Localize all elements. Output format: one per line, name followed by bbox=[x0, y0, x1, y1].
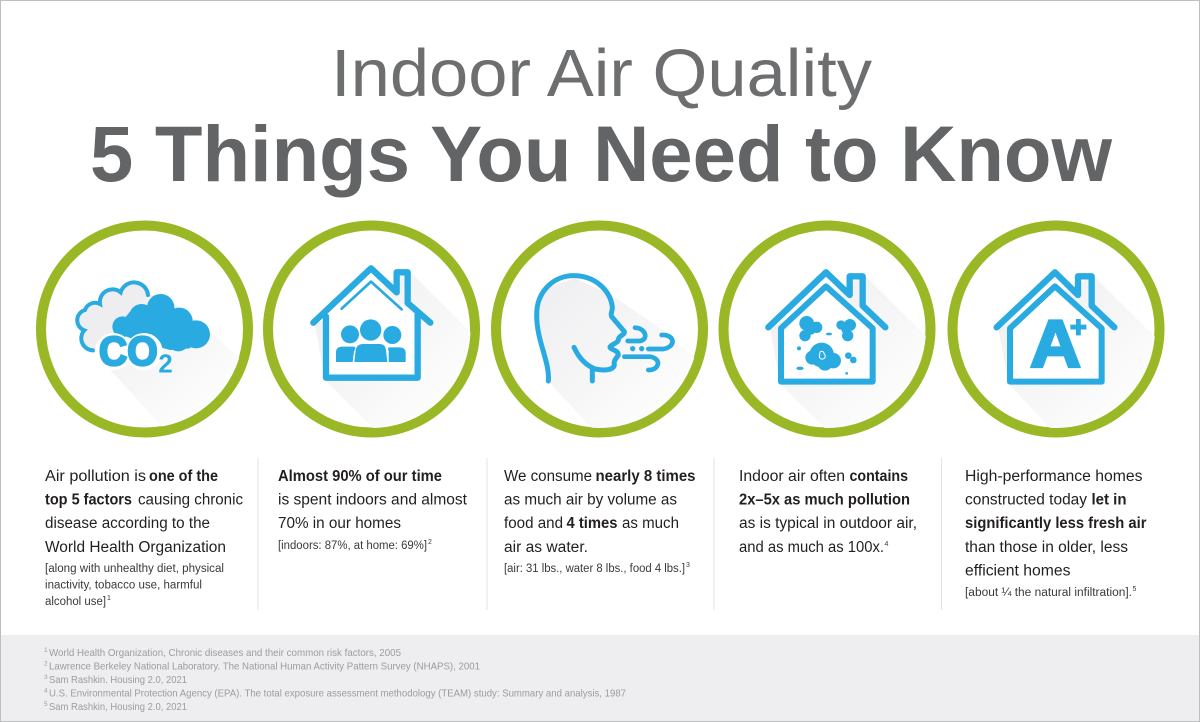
text block 1: air pollution: Air pollution is bbox=[45, 468, 146, 485]
title bbox=[90, 36, 1113, 198]
text block 4: indoor pollution: 2x–5x as much pollution bbox=[739, 492, 910, 508]
text block 5: high-performance homes: High-performance homes bbox=[965, 468, 1143, 485]
panel 4: pollution in house circle icon bbox=[724, 226, 932, 432]
text block 5: high-performance homes: 5 bbox=[1132, 586, 1136, 593]
text block 1: air pollution: alcohol use] bbox=[45, 596, 106, 608]
text block 4: indoor pollution: Indoor air often bbox=[739, 468, 845, 485]
icon: house with A+ rating: + bbox=[1070, 312, 1087, 344]
icon: house with A+ rating bbox=[997, 272, 1114, 382]
text block 5: high-performance homes: let in bbox=[1092, 492, 1126, 508]
text block 4: indoor pollution: contains bbox=[850, 468, 908, 485]
text block 3: air consumed: [air: 31 lbs., water 8 lbs., food 4 lbs.] bbox=[504, 563, 685, 575]
icon: head breathing out bbox=[537, 276, 673, 381]
text block 1: air pollution: World Health Organization bbox=[45, 539, 226, 556]
text block 4: indoor pollution: 4 bbox=[884, 541, 888, 548]
text block 5: high-performance homes: significantly less fresh air bbox=[965, 515, 1146, 532]
text block 2: time indoors: 2 bbox=[428, 539, 432, 546]
text block 2: time indoors: Almost 90% of our time bbox=[278, 468, 442, 485]
text block 1: air pollution: top 5 factors bbox=[45, 492, 132, 508]
text block 2: time indoors bbox=[278, 468, 468, 552]
text block 2: time indoors: is spent indoors and almost bbox=[278, 492, 468, 508]
footnotes: 5 bbox=[44, 701, 48, 708]
icon: house with family bbox=[313, 268, 430, 378]
text block 3: air consumed: 4 times bbox=[566, 515, 618, 532]
footnotes: Lawrence Berkeley National Laboratory. The National Human Activity Pattern Survey (NHAPS), 2001 bbox=[49, 660, 480, 672]
text block 5: high-performance homes: than those in older, less bbox=[965, 539, 1128, 556]
footnotes bbox=[44, 647, 626, 713]
text block 4: indoor pollution bbox=[739, 468, 917, 556]
text block 2: time indoors: 70% in our homes bbox=[278, 515, 401, 532]
text block 1: air pollution: 1 bbox=[107, 595, 111, 602]
title line 1: Indoor Air Quality bbox=[331, 36, 873, 111]
text block 1: air pollution bbox=[45, 468, 243, 608]
text block 3: air consumed bbox=[504, 468, 696, 575]
panel 5: A+ house circle icon bbox=[952, 226, 1160, 432]
text block 3: air consumed: nearly 8 times bbox=[596, 468, 696, 485]
text block 4: indoor pollution: as is typical in outdoor air, bbox=[739, 515, 917, 532]
text block 3: air consumed: We consume bbox=[504, 468, 592, 485]
footnotes: 4 bbox=[44, 688, 48, 694]
panel 2: people in house circle icon bbox=[268, 226, 477, 432]
text block 1: air pollution: inactivity, tobacco use, harmful bbox=[45, 580, 202, 592]
text block 5: high-performance homes: efficient homes bbox=[965, 562, 1071, 580]
text block 3: air consumed: food and bbox=[504, 515, 563, 532]
footnotes: Sam Rashkin. Housing 2.0, 2021 bbox=[49, 674, 187, 686]
text block 1: air pollution: causing chronic bbox=[138, 492, 243, 508]
text block 3: air consumed: as much bbox=[622, 515, 679, 532]
text block 3: air consumed: air as water. bbox=[504, 539, 588, 556]
footnotes: 2 bbox=[44, 660, 48, 668]
footer band bbox=[1, 635, 1199, 721]
text block 1: air pollution: one of the bbox=[149, 468, 218, 485]
footnotes: 3 bbox=[44, 674, 48, 681]
text block 1: air pollution: disease according to the bbox=[45, 515, 210, 532]
text block 2: time indoors: [indoors: 87%, at home: 69%] bbox=[278, 540, 427, 552]
icon: clouds and CO2 bbox=[77, 282, 210, 378]
text block 5: high-performance homes: constructed today bbox=[965, 492, 1087, 508]
icon: house with pollutant clouds bbox=[768, 272, 885, 382]
footnotes: 1 bbox=[44, 647, 48, 654]
icon: clouds and CO2: CO bbox=[99, 328, 158, 374]
title line 2: 5 Things You Need to Know bbox=[90, 109, 1113, 198]
icon: clouds and CO2: 2 bbox=[158, 348, 173, 378]
panel 1: CO2 circle icon bbox=[41, 226, 248, 432]
footnotes: World Health Organization, Chronic diseases and their common risk factors, 2005 bbox=[49, 647, 401, 659]
text block 5: high-performance homes: [about ¼ the natural infiltration]. bbox=[965, 587, 1132, 599]
text block 5: high-performance homes bbox=[965, 468, 1146, 599]
footnotes: U.S. Environmental Protection Agency (EPA). The total exposure assessment methodology (TEAM) study: Summary and analysis, 1987 bbox=[49, 688, 626, 700]
footnotes: Sam Rashkin, Housing 2.0, 2021 bbox=[49, 701, 187, 713]
text block 4: indoor pollution: and as much as 100x. bbox=[739, 539, 884, 556]
text block 1: air pollution: [along with unhealthy diet, physical bbox=[45, 563, 224, 575]
icon: house with A+ rating: A bbox=[1030, 308, 1081, 382]
text block 3: air consumed: as much air by volume as bbox=[504, 492, 677, 508]
panel 3: exhaling head circle icon bbox=[496, 226, 703, 432]
text block 3: air consumed: 3 bbox=[686, 562, 690, 569]
